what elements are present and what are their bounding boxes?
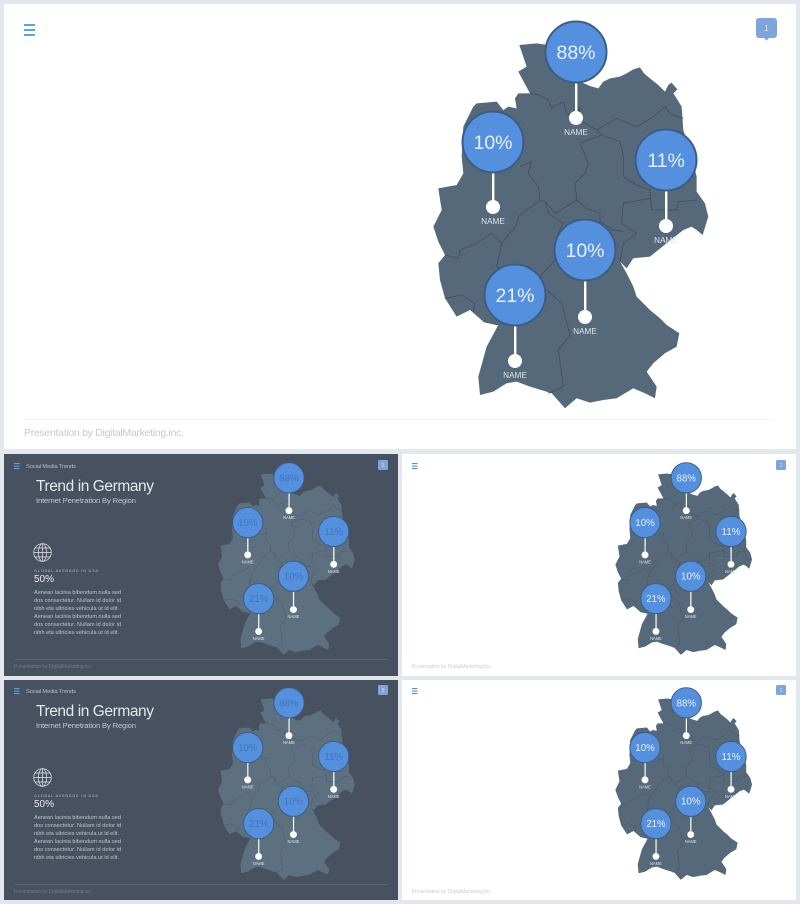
- pin: 21%: [484, 264, 546, 380]
- icon: notification badge: [756, 18, 777, 40]
- subtitle: Internet Penetration By Region: [36, 496, 136, 505]
- map and pins: 10%: [284, 797, 304, 808]
- map and pins: NAME: [253, 861, 265, 866]
- map and pins: NAME: [639, 559, 651, 564]
- map and pins: 88%: [279, 473, 299, 484]
- icon: badge: [378, 685, 388, 695]
- pin: 88%: NAME: [564, 128, 588, 137]
- map and pins: 10%: [681, 797, 701, 808]
- map and pins: NAME: [680, 740, 692, 745]
- map and pins: NAME: [685, 839, 697, 844]
- map and pins: NAME: [680, 515, 692, 520]
- map and pins: 11%: [722, 752, 741, 763]
- section label: Social Media Trends: [26, 464, 76, 470]
- map and pins: 11%: [722, 527, 741, 538]
- map and pins: 21%: [249, 594, 269, 605]
- footer text: Presentation by DigitalMarketing.inc.: [14, 889, 92, 895]
- panel: white slide row 2: [402, 454, 796, 676]
- map and pins: 21%: [249, 819, 269, 830]
- stat label: GLOBAL AVERAGE IN USA: [34, 568, 98, 573]
- body paragraph: nibh eta ultricies vehicula ut id elit.: [34, 630, 119, 636]
- icon: badge: 1: [780, 463, 783, 469]
- body paragraph: nibh eta ultricies vehicula ut id elit.: [34, 606, 119, 612]
- pin: 88%: 88%: [556, 42, 596, 64]
- icon: menu: [14, 463, 20, 469]
- map and pins: NAME: [283, 515, 295, 520]
- map and pins: 11%: [324, 527, 343, 538]
- icon: menu: [14, 688, 20, 694]
- title: Trend in Germany: [36, 703, 154, 720]
- pin: 10% west: 10%: [473, 132, 513, 154]
- map and pins: NAME: [650, 636, 662, 641]
- body paragraph: nibh eta ultricies vehicula ut id elit.: [34, 831, 119, 837]
- map and pins: 10%: [681, 572, 701, 583]
- pin: 21%: NAME: [503, 371, 527, 380]
- body paragraph: Aenean lacinia bibendum nulla sed: [34, 815, 121, 821]
- panel: dark slide row 3: [4, 680, 398, 900]
- map and pins: NAME: [685, 614, 697, 619]
- stat value: 50%: [34, 799, 54, 810]
- icon: badge: [776, 685, 786, 695]
- footer text: Presentation by DigitalMarketing.inc.: [412, 889, 492, 895]
- map and pins: 10%: [284, 572, 304, 583]
- pin: 21%: 21%: [495, 285, 535, 307]
- body paragraph: [34, 590, 121, 636]
- map and pins: 10%: [238, 518, 258, 529]
- map and pins: NAME: [725, 794, 737, 799]
- stat value: 50%: [34, 574, 54, 585]
- panel: dark slide row 2: [4, 454, 398, 676]
- map and pins: 11%: [324, 752, 343, 763]
- map and pins: 10%: [635, 743, 655, 754]
- map and pins: NAME: [288, 614, 300, 619]
- map and pins: NAME: [242, 784, 254, 789]
- pin: 10% west: [462, 112, 524, 226]
- footer text: Presentation by DigitalMarketing.inc.: [412, 664, 492, 670]
- icon: badge: 1: [780, 688, 783, 694]
- section label: Social Media Trends: [26, 689, 76, 695]
- map and pins: NAME: [283, 740, 295, 745]
- body paragraph: dos consectetur. Nullam id dolor id: [34, 622, 121, 628]
- body paragraph: Aenean lacinia bibendum nulla sed: [34, 839, 121, 845]
- icon: badge: [776, 460, 786, 470]
- icon: notification badge: 1: [764, 24, 769, 33]
- icon: hamburger menu: [24, 24, 35, 36]
- map and pins: NAME: [242, 559, 254, 564]
- map and pins: NAME: [288, 839, 300, 844]
- pin: 10% west: NAME: [481, 217, 505, 226]
- body paragraph: dos consectetur. Nullam id dolor id: [34, 847, 121, 853]
- footer text: Presentation by DigitalMarketing.inc.: [14, 664, 92, 670]
- pin: 88%: [546, 22, 606, 137]
- map and pins: 88%: [677, 698, 696, 709]
- pin: 10% centre: [554, 220, 616, 336]
- panel: white slide row 3: [402, 680, 796, 900]
- icon: globe: [34, 544, 51, 561]
- map and pins: NAME: [639, 784, 651, 789]
- pin: 10% centre: NAME: [573, 327, 597, 336]
- map and pins: 21%: [646, 594, 666, 605]
- subtitle: Internet Penetration By Region: [36, 721, 136, 730]
- pin: 11% east: 11%: [647, 150, 685, 172]
- pin: 11% east: [636, 130, 696, 245]
- map and pins: 88%: [677, 473, 696, 484]
- map and pins: NAME: [253, 636, 265, 641]
- map and pins: NAME: [725, 569, 737, 574]
- icon: badge: 2: [382, 688, 385, 694]
- body paragraph: nibh eta ultricies vehicula ut id elit.: [34, 855, 119, 861]
- map and pins: [615, 688, 752, 880]
- map and pins: 88%: [279, 698, 299, 709]
- map and pins: [218, 463, 355, 655]
- footer text: Presentation by DigitalMarketing.inc.: [24, 427, 184, 439]
- icon: globe: [34, 769, 51, 786]
- pin: 10% centre: 10%: [565, 240, 605, 262]
- map and pins: NAME: [650, 861, 662, 866]
- map and pins: 21%: [646, 819, 666, 830]
- icon: badge: [378, 460, 388, 470]
- map and pins: 10%: [238, 743, 258, 754]
- map and pins: NAME: [328, 569, 340, 574]
- pin: 11% east: NAME: [654, 236, 678, 245]
- map and pins: [615, 463, 752, 655]
- body paragraph: dos consectetur. Nullam id dolor id: [34, 823, 121, 829]
- map and pins: NAME: [328, 794, 340, 799]
- body paragraph: dos consectetur. Nullam id dolor id: [34, 598, 121, 604]
- stat label: GLOBAL AVERAGE IN USA: [34, 793, 98, 798]
- body paragraph: Aenean lacinia bibendum nulla sed: [34, 614, 121, 620]
- icon: badge: 2: [382, 463, 385, 469]
- icon: menu: [412, 688, 418, 694]
- map and pins: 10%: [635, 518, 655, 529]
- panel: main slide: [4, 4, 796, 449]
- map of Germany: [433, 43, 708, 408]
- body paragraph: [34, 815, 121, 861]
- icon: menu: [412, 463, 418, 469]
- map and pins: [218, 688, 355, 880]
- body paragraph: Aenean lacinia bibendum nulla sed: [34, 590, 121, 596]
- title: Trend in Germany: [36, 478, 154, 495]
